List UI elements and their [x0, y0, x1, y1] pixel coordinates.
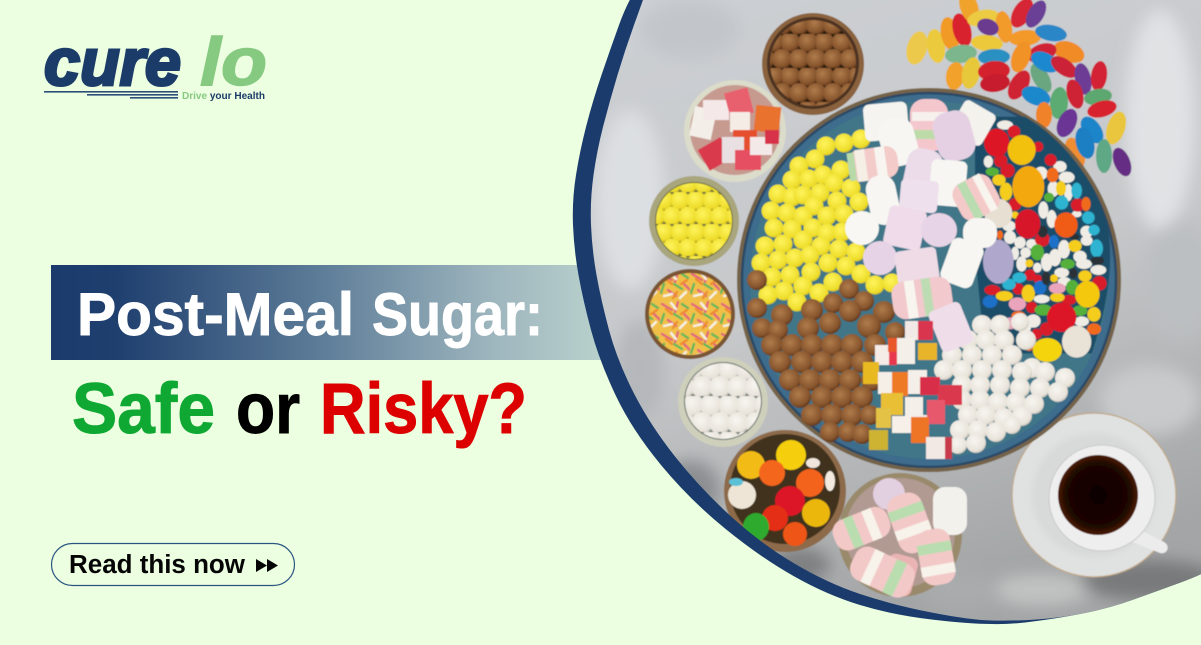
yellow candies on plate [752, 130, 902, 312]
bowl: gummy cubes [684, 80, 786, 182]
large plate [737, 88, 1121, 472]
title line 1: Post-Meal [77, 281, 354, 348]
logo: curelo [44, 24, 267, 102]
bowl: yellow candies [649, 176, 739, 266]
title line 2: or [236, 370, 300, 449]
coffee [1058, 455, 1138, 535]
call-to-action button [52, 544, 294, 586]
coffee cup and saucer [1012, 413, 1176, 577]
bowl: striped marshmallows [829, 473, 967, 602]
cup [1049, 445, 1155, 551]
call-to-action button: Read this now [69, 551, 245, 579]
title line 2 [72, 370, 527, 449]
bowl: white candies [678, 357, 768, 447]
plate interior [750, 101, 1108, 459]
plate rim [737, 88, 1121, 472]
logo wordmark: cure [44, 25, 181, 99]
icon: double arrow [256, 559, 278, 572]
gummy cubes on plate [863, 321, 962, 459]
white candies on plate [934, 313, 1075, 454]
photo of sweets in circle [560, 0, 1201, 645]
cup handle [1133, 532, 1168, 554]
logo wordmark [44, 24, 267, 100]
saucer [1012, 413, 1176, 577]
bowl: coloured candies [724, 430, 846, 552]
title line 2: Risky? [320, 370, 527, 449]
logo speed lines [44, 91, 178, 99]
title line 1 [77, 281, 543, 348]
coloured candies on plate [975, 117, 1110, 362]
marshmallows on plate [845, 98, 1004, 354]
brown candies on plate [747, 270, 905, 444]
title line 1: Sugar: [372, 281, 543, 348]
jelly beans [903, 0, 1135, 179]
bowl: sprinkles [645, 269, 735, 359]
navy circle ring [573, 0, 1201, 624]
title band [51, 265, 601, 360]
title line 2: Safe [72, 370, 215, 449]
logo wordmark: lo [200, 24, 267, 100]
bowl: brown nuts [762, 13, 864, 115]
logo tagline: Drive your Health [182, 90, 265, 102]
marble background [560, 0, 1201, 645]
